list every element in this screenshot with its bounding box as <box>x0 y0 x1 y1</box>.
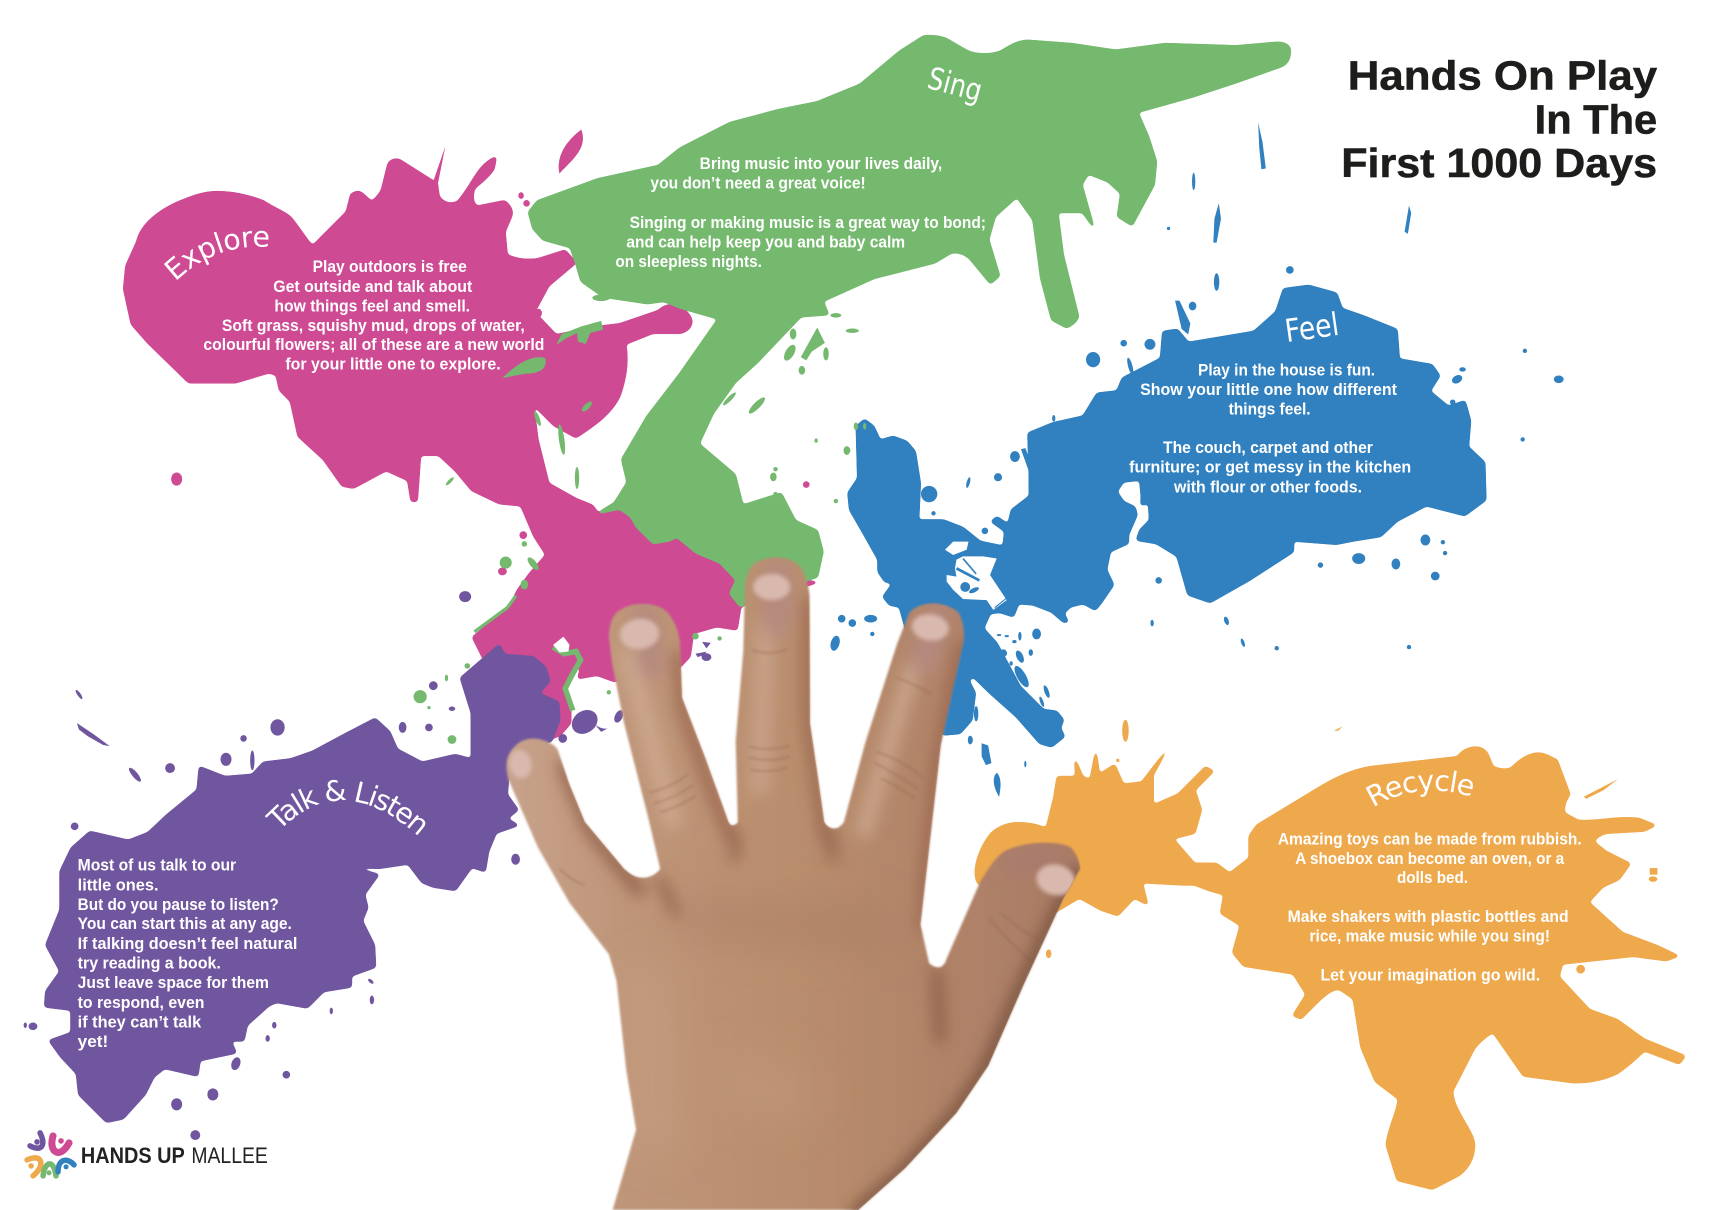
text block: recycle <box>1278 829 1582 984</box>
text block: talk and listen <box>78 856 297 1051</box>
splat: purple blob <box>45 645 559 1122</box>
splat: green flecks on wing <box>835 422 866 502</box>
text block: recycle: Make shakers with plastic bottles and <box>1288 907 1569 926</box>
title: In The <box>1535 96 1657 142</box>
text block: talk and listen: If talking doesn’t feel natural <box>78 934 297 953</box>
logo: Hands Up Mallee <box>27 1133 268 1176</box>
splat: pink droplets <box>171 130 810 575</box>
text block: sing <box>615 154 986 271</box>
icon: logo people <box>27 1133 74 1176</box>
text block: feel: with flour or other foods. <box>1173 477 1362 496</box>
logo wordmark: MALLEE <box>191 1143 268 1168</box>
heading: Explore: Explore <box>164 230 268 280</box>
text block: feel: The couch, carpet and other <box>1163 438 1373 457</box>
title: First 1000 Days <box>1341 140 1657 186</box>
splat: blue droplets <box>829 122 1564 797</box>
splat: green droplets <box>414 294 859 744</box>
text block: talk and listen: Just leave space for them <box>78 973 269 992</box>
text block: talk and listen: try reading a book. <box>78 953 221 972</box>
fingernails <box>507 574 1078 899</box>
splat: blue flecks in gap <box>956 559 1007 608</box>
text block: feel: Play in the house is fun. <box>1198 360 1375 379</box>
panel: talk and listen splat <box>24 591 711 1140</box>
splat: purple droplets <box>24 591 711 1140</box>
text block: explore: Soft grass, squishy mud, drops of water, <box>222 316 525 335</box>
text block: recycle: A shoebox can become an oven, or a <box>1295 849 1565 868</box>
text block: explore: colourful flowers; all of these are a new world <box>203 335 544 354</box>
knuckle creases <box>560 649 924 886</box>
text block: talk and listen: yet! <box>78 1032 108 1051</box>
title <box>1341 53 1658 186</box>
text block: talk and listen: little ones. <box>78 875 159 894</box>
panel: sing text <box>615 60 986 271</box>
text block: feel: things feel. <box>1229 399 1311 418</box>
text block: talk and listen: to respond, even <box>78 993 204 1012</box>
panel: explore splat <box>124 130 817 739</box>
text block: sing: and can help keep you and baby calm <box>626 233 905 252</box>
panel: talk and listen text <box>78 780 426 1051</box>
text block: explore: how things feel and smell. <box>274 297 470 316</box>
splat: blue blob with wing and tail <box>848 286 1486 747</box>
text block: talk and listen: You can start this at any age. <box>78 914 292 933</box>
hand shading <box>507 574 1078 1210</box>
heading: Sing: Sing <box>924 60 986 109</box>
splat: orange droplets <box>1046 720 1657 974</box>
text block: recycle: Let your imagination go wild. <box>1320 965 1540 984</box>
panel: sing splat <box>414 36 1290 744</box>
logo wordmark: HANDS UP <box>81 1143 185 1168</box>
splat: orange blob <box>976 747 1685 1189</box>
splat: sing green blob <box>529 36 1290 607</box>
text block: recycle: Amazing toys can be made from rubbish. <box>1278 829 1582 848</box>
text block: feel: Show your little one how different <box>1140 380 1397 399</box>
text block: sing: on sleepless nights. <box>615 252 762 271</box>
text block: explore <box>203 257 544 373</box>
text block: recycle: rice, make music while you sing! <box>1310 927 1550 946</box>
text block: talk and listen: But do you pause to listen? <box>78 895 279 914</box>
panel: explore text <box>164 230 544 373</box>
panel: recycle splat <box>976 720 1685 1189</box>
text block: feel: furniture; or get messy in the kitchen <box>1129 458 1411 477</box>
text block: talk and listen: if they can’t talk <box>78 1012 202 1031</box>
splat: explore pink blob <box>124 157 817 739</box>
heading: Feel: Feel <box>1282 306 1341 350</box>
heading: Talk & Listen: Talk & Listen <box>264 780 426 836</box>
text block: sing: Singing or making music is a great way to bond; <box>630 213 986 232</box>
text block: explore: for your little one to explore. <box>285 354 501 373</box>
heading: Recycle: Recycle <box>1366 770 1473 806</box>
text block: sing: you don’t need a great voice! <box>650 174 866 193</box>
title: Hands On Play <box>1348 53 1658 99</box>
panel: feel splat <box>829 122 1564 797</box>
panel: recycle text <box>1278 770 1582 984</box>
splat: white gaps in wing <box>945 542 1007 610</box>
text block: talk and listen: Most of us talk to our <box>78 856 237 875</box>
panel: feel text <box>1129 306 1411 496</box>
text block: feel <box>1129 360 1411 496</box>
splat: pink hole and green rim <box>474 596 580 710</box>
text block: recycle: dolls bed. <box>1397 868 1468 887</box>
text block: explore: Play outdoors is free <box>313 257 467 276</box>
text block: explore: Get outside and talk about <box>273 277 473 296</box>
photo: child's hand <box>506 557 1080 1210</box>
text block: sing: Bring music into your lives daily, <box>700 154 942 173</box>
